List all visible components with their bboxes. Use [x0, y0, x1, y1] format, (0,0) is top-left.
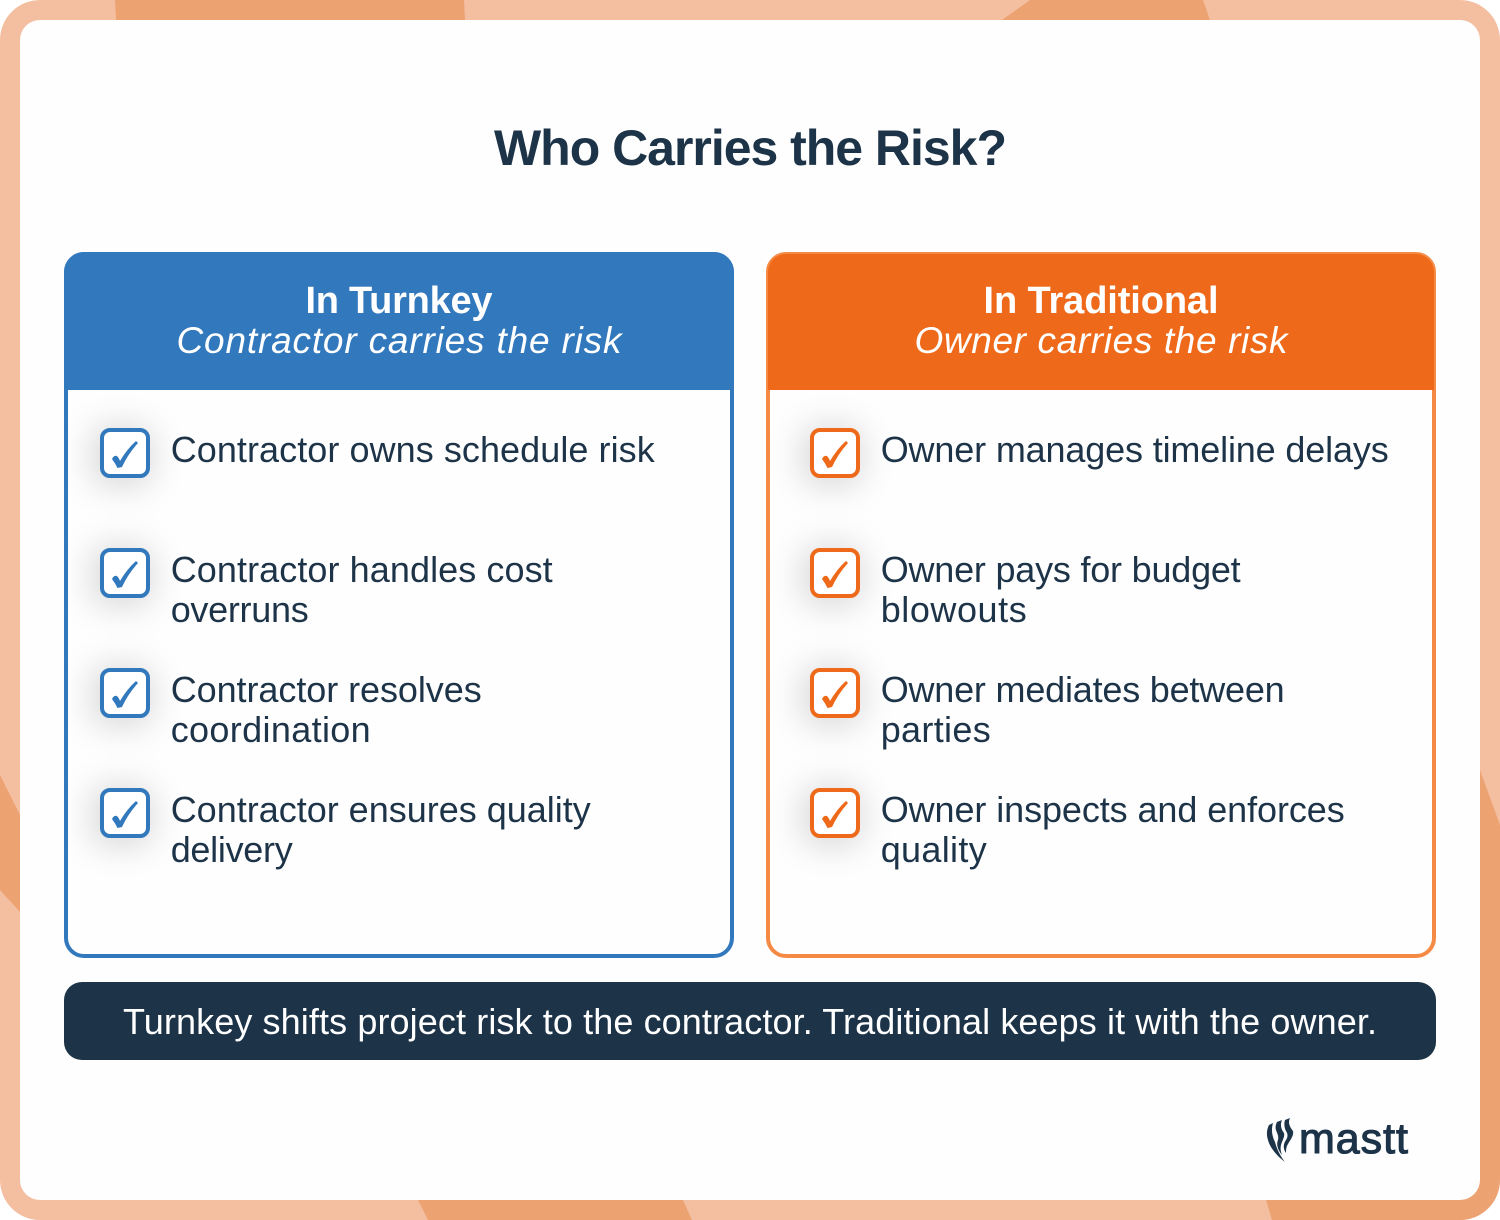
panel header: traditional: Owner carries the risk — [914, 320, 1290, 361]
item: budget blowouts: Owner pays for budget — [881, 549, 1241, 590]
item: coordination — [102, 669, 482, 750]
item: mediates parties: parties — [881, 709, 991, 750]
panel header: turnkey — [64, 252, 734, 390]
item: coordination: Contractor resolves — [171, 669, 482, 710]
item: coordination: coordination — [171, 709, 371, 750]
summary banner: Turnkey shifts project risk to the contractor. Traditional keeps it with the owner. — [123, 1001, 1377, 1042]
item: cost overruns: Contractor handles cost — [171, 549, 553, 590]
item: budget blowouts — [812, 549, 1241, 630]
item: cost overruns: overruns — [171, 589, 309, 630]
checkbox shadows: traditional — [804, 428, 860, 844]
icon: mastt flame — [1267, 1118, 1293, 1162]
panel: in traditional — [768, 254, 1434, 956]
item: cost overruns — [102, 549, 553, 630]
item: inspects quality: quality — [881, 829, 987, 870]
panel header: turnkey: In Turnkey — [306, 280, 492, 322]
panel header: traditional: In Traditional — [984, 280, 1218, 322]
item: quality delivery: delivery — [171, 829, 293, 870]
item: timeline delays: Owner manages timeline delays — [881, 429, 1389, 470]
item: inspects quality — [812, 789, 1345, 870]
item: quality delivery: Contractor ensures quality — [171, 789, 591, 830]
logo: mastt: mastt — [1299, 1115, 1408, 1163]
title: Who Carries the Risk? — [494, 120, 1007, 176]
panel: in turnkey — [64, 252, 734, 956]
item: inspects quality: Owner inspects and enforces — [881, 789, 1345, 830]
item: quality delivery — [102, 789, 591, 870]
checkbox shadows: turnkey — [94, 428, 150, 844]
panel header: traditional — [768, 254, 1434, 390]
panel header: turnkey: Contractor carries the risk — [176, 320, 624, 361]
item: budget blowouts: blowouts — [881, 589, 1027, 630]
summary banner — [64, 982, 1436, 1060]
item: mediates parties: Owner mediates between — [881, 669, 1285, 710]
item: mediates parties — [812, 669, 1285, 750]
item: schedule risk: Contractor owns schedule risk — [171, 429, 656, 470]
